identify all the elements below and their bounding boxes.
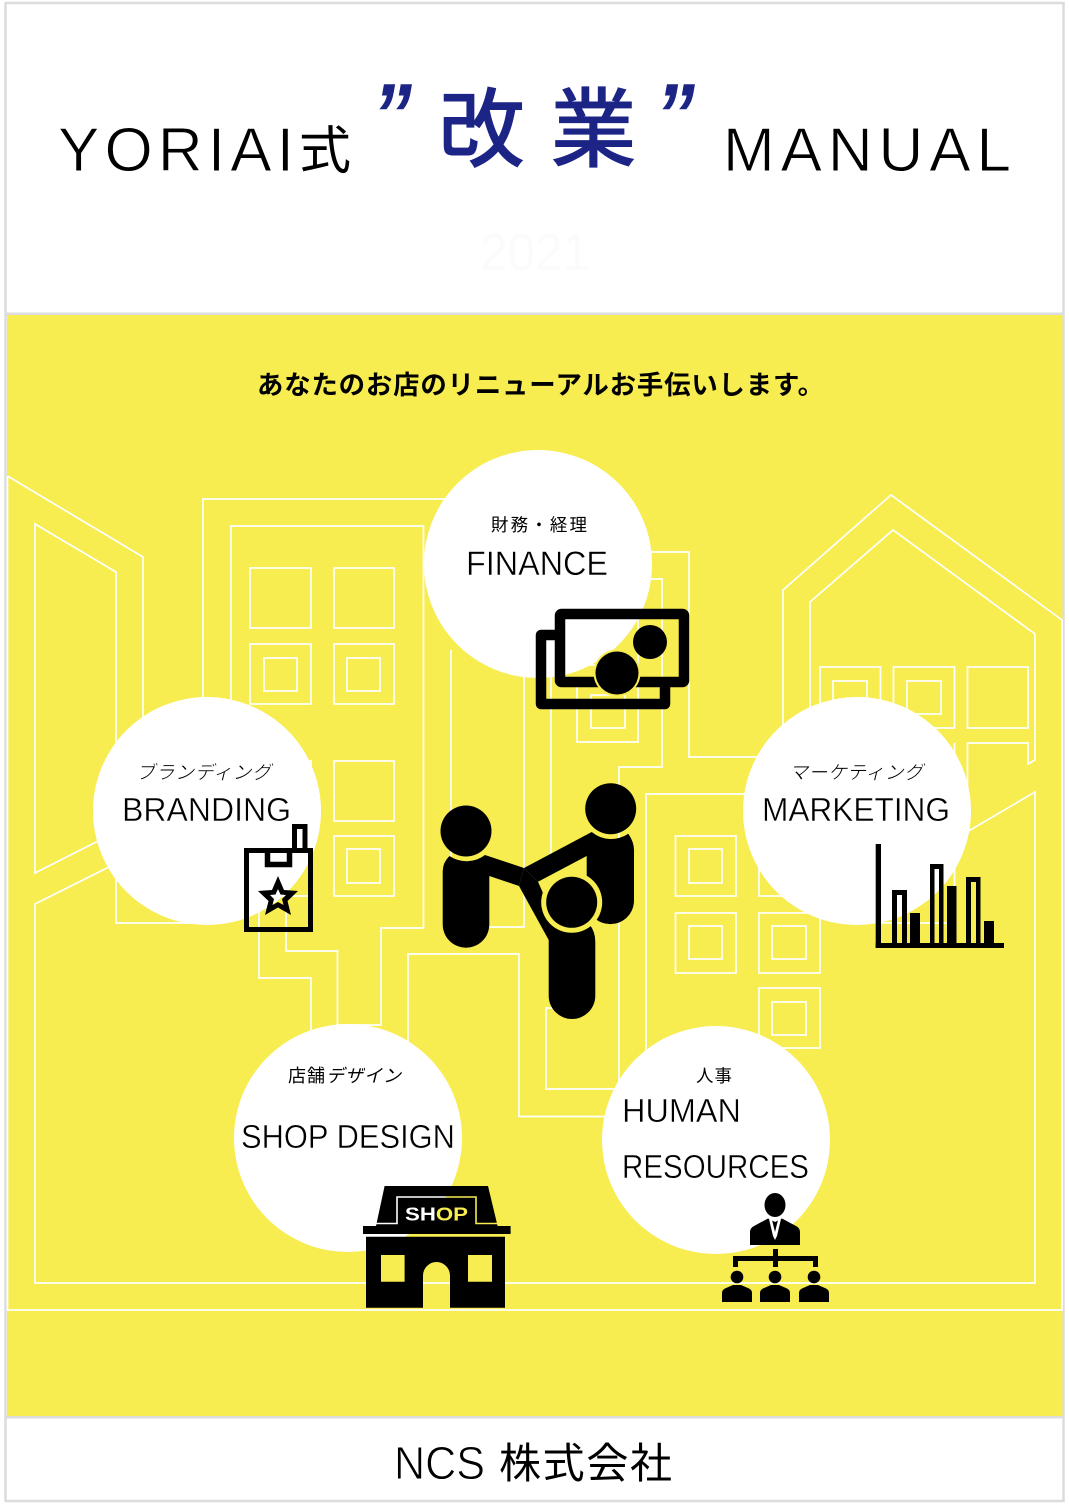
icon: organization chart bbox=[722, 1193, 829, 1302]
footer company name: 株式会社 bbox=[499, 1430, 672, 1491]
panel: branding bbox=[93, 697, 321, 925]
title: ” bbox=[372, 65, 412, 164]
panel: shop design: SHOP DESIGN bbox=[241, 1118, 455, 1155]
title: YORIAI bbox=[58, 116, 294, 185]
footer company name: NCS bbox=[394, 1437, 485, 1489]
footer company name bbox=[394, 1430, 672, 1491]
panel: human resources: RESOURCES bbox=[622, 1148, 809, 1185]
shop sign text: SH OP bbox=[405, 1204, 468, 1224]
panel: marketing bbox=[743, 697, 971, 925]
icon: shopping bag with star bbox=[246, 826, 310, 930]
icon: shop building bbox=[363, 1186, 511, 1308]
panel: human resources bbox=[602, 1026, 830, 1254]
title: ” bbox=[655, 65, 695, 164]
tagline: あなたのお店のリニューアルお手伝いします。 bbox=[257, 363, 824, 402]
panel: finance: FINANCE bbox=[466, 545, 608, 583]
faint year: 2021 bbox=[480, 224, 590, 282]
panel: human resources: 人事 bbox=[696, 1063, 732, 1088]
background building line art bbox=[8, 476, 1062, 1310]
panel: shop design: 店舗デザイン bbox=[288, 1062, 402, 1088]
icon: bar chart bbox=[876, 844, 1004, 948]
title: 改 bbox=[438, 60, 525, 186]
panel: branding: BRANDING bbox=[122, 791, 291, 828]
panel: branding: ブランディング bbox=[136, 758, 274, 785]
central illustration: three people joining hands bbox=[440, 783, 636, 1019]
panel: marketing: マーケティング bbox=[789, 758, 926, 785]
panel: finance bbox=[424, 450, 652, 678]
title: 式 bbox=[299, 109, 351, 184]
panel: human resources: HUMAN bbox=[622, 1092, 741, 1129]
title: MANUAL bbox=[723, 116, 1011, 185]
icon: banknotes and coins bbox=[541, 614, 684, 704]
panel: marketing: MARKETING bbox=[762, 791, 950, 828]
panel: finance: 財務・経理 bbox=[491, 512, 587, 537]
panel: shop design bbox=[234, 1024, 462, 1252]
title bbox=[58, 60, 1011, 186]
title: 業 bbox=[550, 60, 637, 186]
